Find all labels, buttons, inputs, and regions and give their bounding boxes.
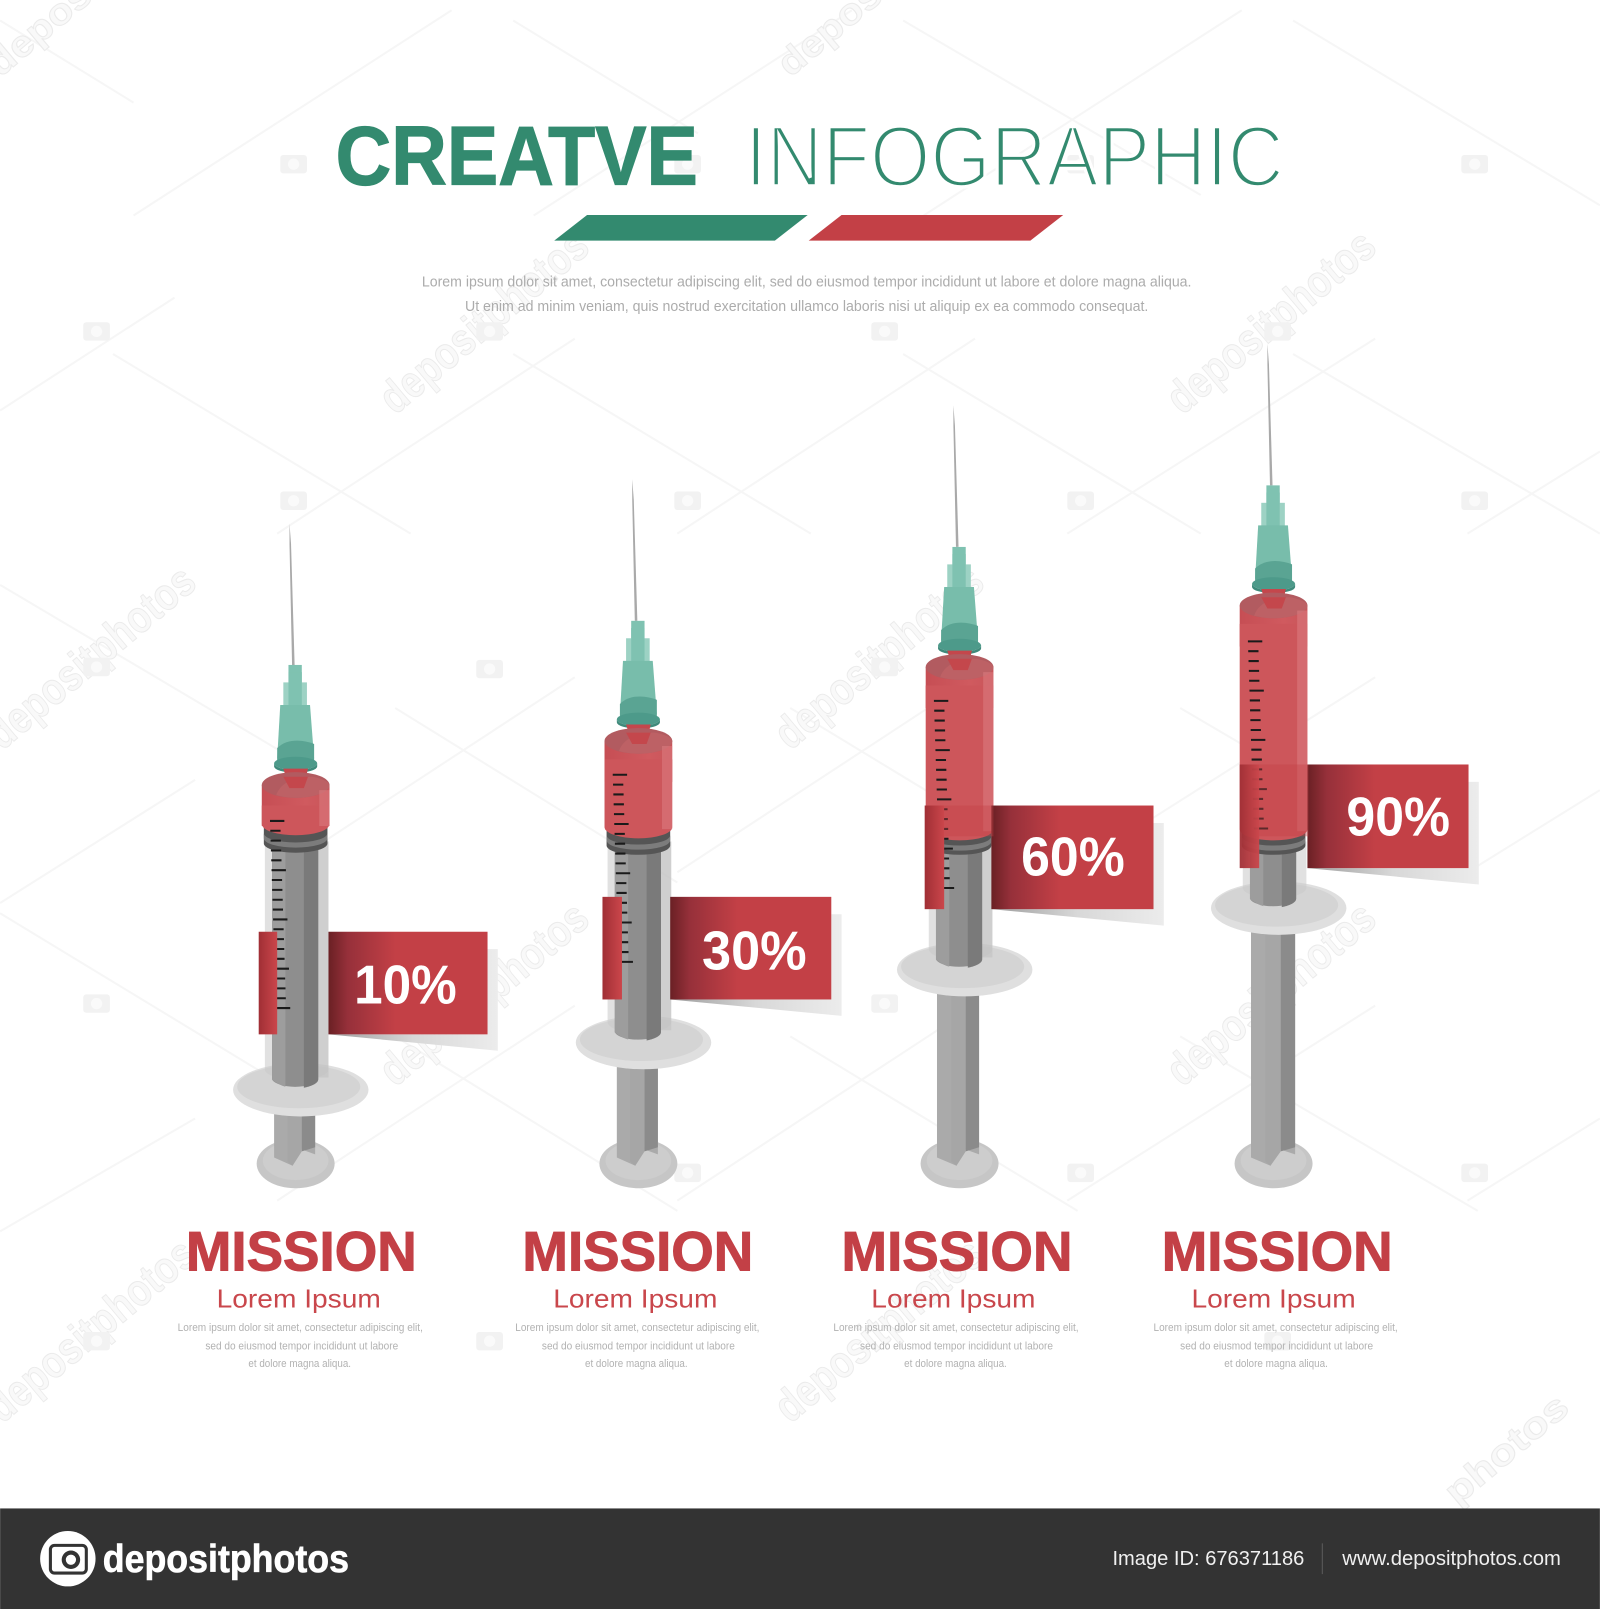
percentage label (259, 932, 488, 1034)
syringe 2: 30% (576, 479, 842, 1188)
watermark pattern: depositphotos (1156, 219, 1385, 423)
intro paragraph: Lorem ipsum dolor sit amet, consectetur adipiscing elit, sed do eiusmod tempor incididunt ut labore et dolore magna aliqua. (422, 274, 1191, 290)
syringe body (1211, 344, 1346, 1188)
heading: MISSION (186, 1220, 417, 1282)
label shadow (991, 823, 1164, 926)
description: et dolore magna aliqua. (904, 1358, 1007, 1370)
syringe body (897, 405, 1032, 1188)
watermark pattern: depositphotos (764, 1228, 993, 1432)
label shadow (1307, 782, 1479, 885)
watermark pattern: depositphotos (369, 219, 598, 423)
description: et dolore magna aliqua. (1224, 1358, 1328, 1370)
description: et dolore magna aliqua. (248, 1358, 351, 1370)
watermark pattern: depositphotos (764, 555, 993, 759)
description (833, 1322, 1079, 1370)
intro paragraph: Ut enim ad minim veniam, quis nostrud exercitation ullamco laboris nisi ut aliquip ex ea commodo consequat. (465, 299, 1148, 315)
description: Lorem ipsum dolor sit amet, consectetur adipiscing elit, (1154, 1322, 1398, 1334)
value: 60%: 60% (1021, 826, 1125, 887)
heading: MISSION (1162, 1220, 1393, 1282)
watermark pattern: depositphotos (369, 891, 598, 1095)
brand name: depositphotos (103, 1538, 349, 1581)
icon: camera logo (40, 1531, 96, 1586)
syringe body (233, 523, 369, 1188)
syringe 1: 10% (233, 523, 498, 1188)
description (515, 1322, 759, 1370)
percentage label (1240, 764, 1469, 868)
subheading: Lorem Ipsum (553, 1285, 717, 1313)
watermark pattern: depositphotos (1156, 891, 1385, 1095)
watermark pattern: photos (1436, 1385, 1576, 1513)
value: 30%: 30% (702, 921, 807, 982)
syringe 4: 90% (1211, 344, 1479, 1188)
description: sed do eiusmod tempor incididunt ut labore (1180, 1340, 1373, 1352)
description: sed do eiusmod tempor incididunt ut labore (542, 1340, 735, 1352)
value: 10%: 10% (354, 955, 457, 1016)
title underline bars (554, 215, 1063, 241)
title: bold word: CREATVE (336, 110, 698, 203)
column 3 text (833, 1220, 1079, 1370)
syringe body (576, 479, 711, 1188)
syringe 3: 60% (897, 405, 1164, 1188)
percentage label (602, 897, 831, 999)
footer bar (0, 1508, 1600, 1609)
value: 90%: 90% (1346, 786, 1450, 847)
image id: Image ID: 676371186 (1112, 1547, 1304, 1570)
label shadow (670, 914, 842, 1016)
description: et dolore magna aliqua. (585, 1358, 688, 1370)
column 2 text (515, 1220, 759, 1370)
subheading: Lorem Ipsum (1191, 1285, 1356, 1313)
percentage label (925, 806, 1154, 909)
intro paragraph (422, 274, 1191, 315)
description (178, 1322, 423, 1370)
description: Lorem ipsum dolor sit amet, consectetur adipiscing elit, (833, 1322, 1079, 1334)
column 1 text (178, 1220, 423, 1370)
description: sed do eiusmod tempor incididunt ut labore (860, 1340, 1053, 1352)
label shadow (328, 949, 498, 1051)
description: Lorem ipsum dolor sit amet, consectetur adipiscing elit, (178, 1322, 423, 1334)
website: www.depositphotos.com (1341, 1547, 1561, 1570)
subheading: Lorem Ipsum (871, 1285, 1036, 1313)
heading: MISSION (522, 1220, 753, 1282)
title (336, 109, 1284, 205)
subheading: Lorem Ipsum (217, 1285, 381, 1313)
description: Lorem ipsum dolor sit amet, consectetur adipiscing elit, (515, 1322, 759, 1334)
description: sed do eiusmod tempor incididunt ut labore (205, 1340, 398, 1352)
title: thin word: INFOGRAPHIC (745, 109, 1284, 205)
description (1154, 1322, 1398, 1370)
heading: MISSION (842, 1220, 1072, 1282)
column 4 text (1154, 1220, 1398, 1370)
